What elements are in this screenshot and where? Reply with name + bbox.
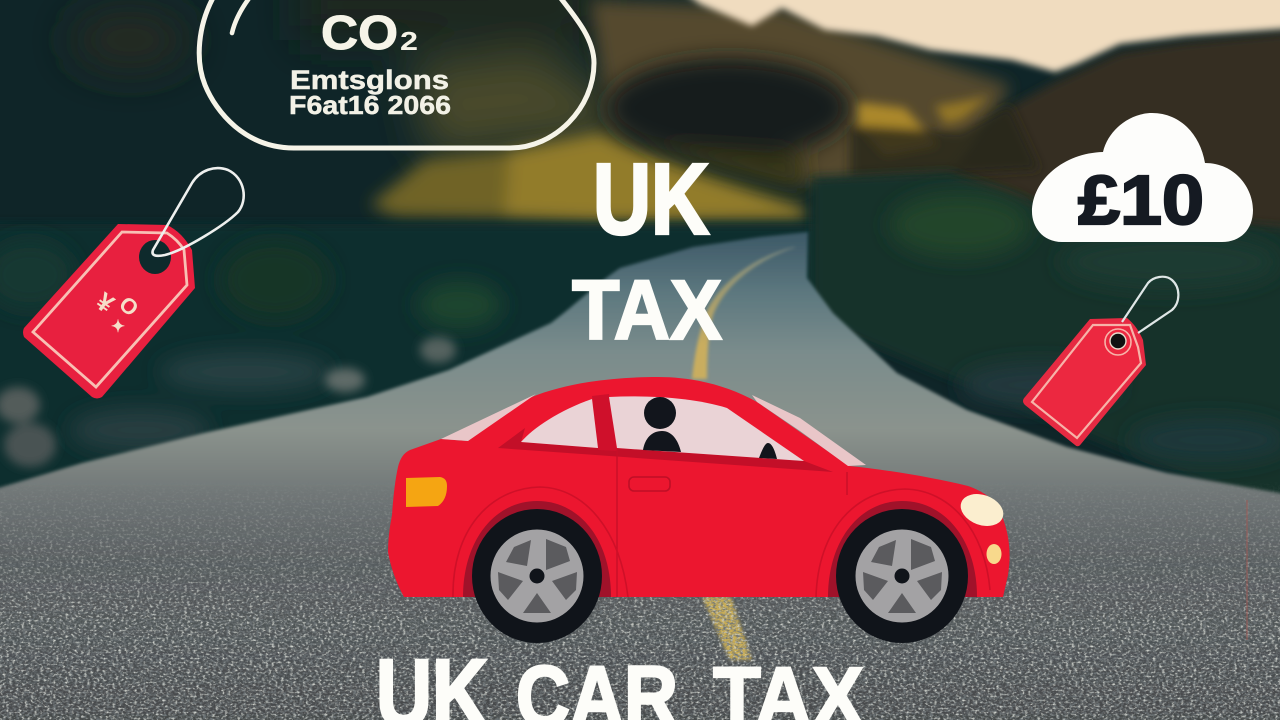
sky <box>668 0 1280 72</box>
car body <box>388 377 1010 597</box>
tag string loop <box>152 168 244 256</box>
title word: TAX: TAX <box>572 263 722 357</box>
rear wheel arch lines <box>453 487 628 597</box>
front side window <box>609 396 804 461</box>
emissions text line 1: Emtsglons <box>290 65 449 95</box>
rear light <box>406 477 447 507</box>
CO2 label: CO <box>321 7 398 60</box>
rear wheel arch <box>463 501 611 597</box>
faint roadside line <box>1246 500 1248 640</box>
tag string loop <box>1122 277 1178 333</box>
steering wheel <box>759 443 777 459</box>
tag body <box>1023 318 1146 446</box>
badge highlight arc <box>232 0 250 33</box>
CO2 emissions badge <box>199 0 594 148</box>
tag text <box>91 286 143 336</box>
left price tag <box>23 168 244 398</box>
driver head <box>644 397 676 429</box>
front wheel <box>836 509 968 643</box>
cloud shape <box>1032 113 1253 242</box>
road with asphalt texture <box>0 232 1280 720</box>
right price tag <box>1023 277 1178 446</box>
tag eyelet rings <box>1105 329 1131 355</box>
title word: UK: UK <box>593 144 709 256</box>
rear wheel <box>472 509 602 643</box>
door handle <box>629 477 670 491</box>
headlight <box>956 488 1008 532</box>
tag text: O <box>114 291 143 321</box>
centre line: near section <box>702 597 752 660</box>
tag inner border <box>1032 325 1141 438</box>
cloud price text: £10 <box>1078 161 1204 239</box>
tag hole <box>139 240 171 274</box>
tag body <box>23 224 195 398</box>
windscreen sliver <box>752 395 866 466</box>
bottom title: UK CAR TAX <box>376 640 864 720</box>
fog light <box>986 544 1002 564</box>
centre line: far section <box>692 247 796 379</box>
tag text: ¥ <box>91 286 120 319</box>
window pillar <box>592 394 617 451</box>
CO2 subscript: 2 <box>400 26 418 56</box>
right forest <box>812 172 1280 520</box>
badge outline <box>199 0 594 148</box>
window frame shadow <box>498 428 833 472</box>
right hill <box>950 32 1280 240</box>
red car illustration <box>388 377 1010 643</box>
driver body <box>643 431 681 452</box>
road surface <box>0 232 1280 720</box>
front wheel arch <box>828 501 977 597</box>
cloud price badge <box>1032 113 1253 242</box>
rear side window <box>521 399 598 448</box>
front wheel arch lines <box>816 489 990 597</box>
rear window sliver <box>441 394 536 441</box>
emissions text line 2: F6at16 2066 <box>289 90 451 120</box>
tag inner border <box>33 232 187 387</box>
door seams <box>617 450 847 597</box>
tag hole <box>1110 333 1126 349</box>
tag text: ✦ <box>111 317 125 336</box>
left forest <box>0 224 820 514</box>
asphalt grain <box>0 480 1280 720</box>
